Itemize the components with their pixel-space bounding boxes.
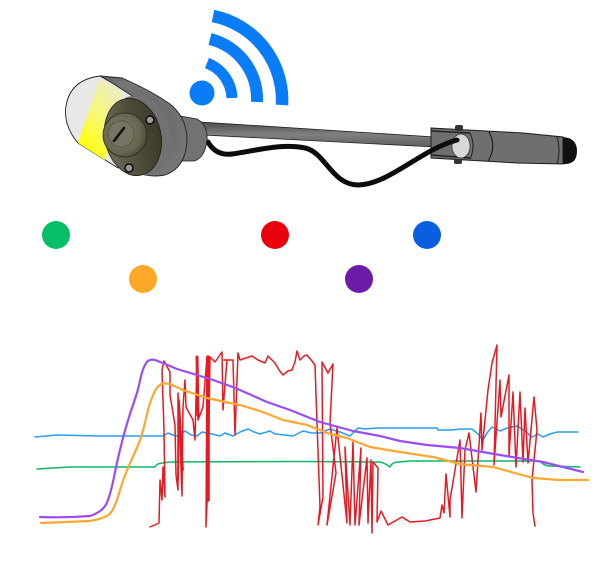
dot: orange: [129, 265, 157, 293]
dot: purple: [345, 265, 373, 293]
line: blue: [35, 426, 578, 440]
body right cover: [120, 95, 172, 175]
lamp head body: [80, 76, 187, 176]
rod: [200, 122, 435, 147]
dot: green: [42, 221, 70, 249]
connector dome: [103, 113, 147, 157]
line: purple: [40, 360, 583, 517]
sensor probe device: [65, 76, 577, 185]
dot: red: [261, 221, 289, 249]
lens window: [65, 76, 140, 168]
yellow light strip: [78, 78, 124, 160]
line chart: [35, 345, 588, 533]
handle: [431, 125, 577, 164]
slot: [114, 128, 124, 141]
screws: [146, 116, 154, 124]
icon: wifi signal: [190, 16, 282, 106]
line: green: [37, 461, 580, 469]
collar: [176, 116, 207, 161]
legend dots: [42, 221, 441, 293]
cable: [208, 140, 457, 185]
olive mount plate: [98, 93, 168, 181]
line: red: [150, 345, 537, 533]
line: orange: [41, 383, 588, 523]
dot: blue: [413, 221, 441, 249]
